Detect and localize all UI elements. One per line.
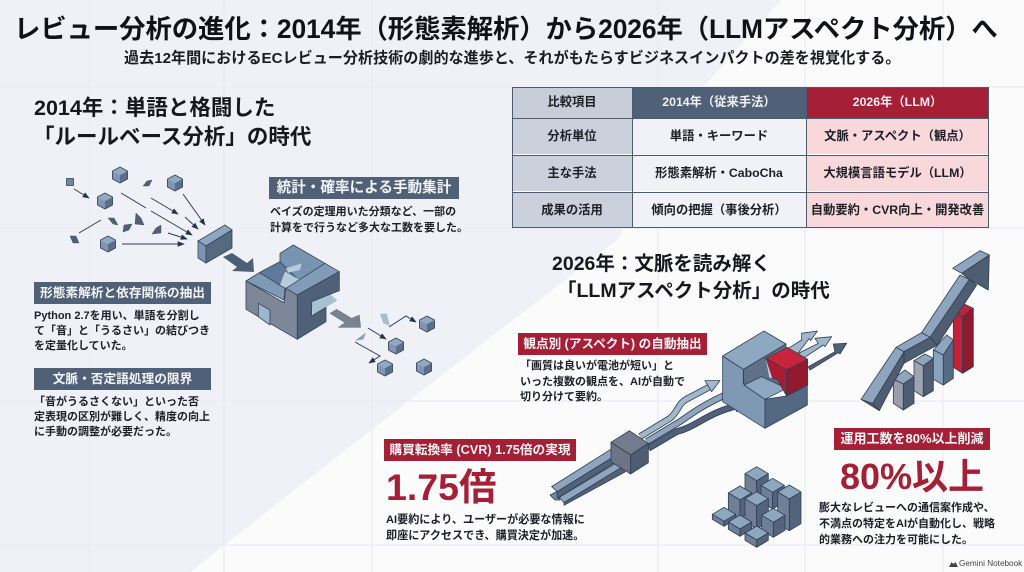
text: morphological analysis: を定量化していた。: [34, 340, 133, 352]
row: unit: 文脈・アスペクト（観点）: [824, 129, 971, 143]
heading: 2026 era: 「LLMアスペクト分析」の時代: [557, 280, 830, 302]
header row: 2014年（従来手法）: [662, 95, 776, 109]
tag: statistics: 統計・確率による手動集計: [277, 180, 451, 196]
text: statistics: ベイズの定理用いた分類など、一部の: [270, 206, 456, 218]
text: CVR: 即座にアクセスでき、購買決定が加速。: [386, 530, 584, 542]
text: workload: 不満点の特定をAIが自動化し、戦略: [819, 518, 995, 530]
text: aspect extraction: [520, 359, 685, 403]
tag: aspect extraction: 観点別 (アスペクト) の自動抽出: [523, 337, 702, 351]
text: negation limit: 定表現の区別が難しく、精度の向上: [34, 411, 210, 423]
header row: 2026年（LLM）: [853, 95, 942, 109]
row: method: 形態素解析・CaboCha: [655, 166, 783, 180]
header row: [513, 88, 988, 118]
footer credit: Gemini Notebook: [959, 559, 1022, 568]
row: method: 主な手法: [547, 166, 597, 180]
tag: statistics: [269, 177, 459, 199]
text: aspect extraction: 「画質は良いが電池が短い」と: [520, 360, 674, 372]
row: usage: 自動要約・CVR向上・開発改善: [811, 203, 984, 217]
row: unit: [513, 119, 988, 154]
text: workload: [819, 502, 995, 546]
text: negation limit: に手動の調整が必要だった。: [34, 426, 177, 438]
tag: workload: 運用工数を80%以上削減: [840, 431, 984, 446]
text: statistics: 計算をで行うなど多大な工数を要した。: [270, 222, 468, 234]
text: workload: 的業務への注力を可能にした。: [819, 534, 973, 546]
table rules: [512, 87, 989, 228]
text: statistics: [270, 205, 468, 234]
text: morphological analysis: Python 2.7を用い、単語を分割し: [34, 310, 200, 322]
header row: 比較項目: [547, 95, 597, 109]
row: usage: [513, 193, 988, 227]
tag: CVR: 購買転換率 (CVR) 1.75倍の実現: [389, 443, 571, 457]
stat: 80%: 80%以上: [840, 456, 984, 497]
tag: morphological analysis: 形態素解析と依存関係の抽出: [40, 286, 205, 300]
heading: 2014 era: 「ルールベース分析」の時代: [33, 125, 311, 149]
tag: morphological analysis: [34, 282, 211, 304]
text: morphological analysis: [34, 310, 210, 352]
tag: CVR: [384, 439, 576, 461]
tag: negation limit: 文脈・否定語処理の限界: [53, 372, 192, 386]
text: aspect extraction: 切り分けて要約。: [520, 391, 608, 403]
stat: 1.75x: 1.75倍: [386, 466, 496, 508]
row: usage: 成果の活用: [541, 203, 603, 217]
tag: workload: [834, 428, 990, 450]
row: method: 大規模言語モデル（LLM）: [823, 166, 972, 180]
text: negation limit: [34, 395, 210, 438]
text: CVR: [386, 512, 585, 542]
row: unit: 分析単位: [547, 129, 597, 143]
row: method: [513, 156, 988, 191]
title: レビュー分析の進化：2014年（形態素解析）から2026年（LLMアスペクト分析）へ: [14, 14, 998, 44]
comparison table: [512, 87, 989, 228]
heading: 2026 era: [552, 253, 830, 302]
row: unit: 単語・キーワード: [670, 129, 768, 143]
text: CVR: AI要約により、ユーザーが必要な情報に: [386, 514, 585, 526]
text: workload: 膨大なレビューへの通信案作成や、: [819, 502, 995, 514]
text: negation limit: 「音がうるさくない」といった否: [34, 396, 199, 408]
row: usage: 傾向の把握（事後分析）: [651, 203, 787, 217]
heading: 2014 era: [33, 96, 311, 149]
tag: aspect extraction: [518, 333, 707, 355]
heading: 2026 era: 2026年：文脈を読み解く: [552, 253, 771, 275]
text: morphological analysis: て「音」と「うるさい」の結びつき: [34, 325, 210, 337]
subtitle: 過去12年間におけるECレビュー分析技術の劇的な進歩と、それがもたらすビジネスインパクトの差を視覚化する。: [124, 50, 900, 67]
tag: negation limit: [34, 368, 211, 390]
text: aspect extraction: いった複数の観点を、AIが自動で: [520, 376, 685, 388]
heading: 2014 era: 2014年：単語と格闘した: [34, 96, 275, 120]
